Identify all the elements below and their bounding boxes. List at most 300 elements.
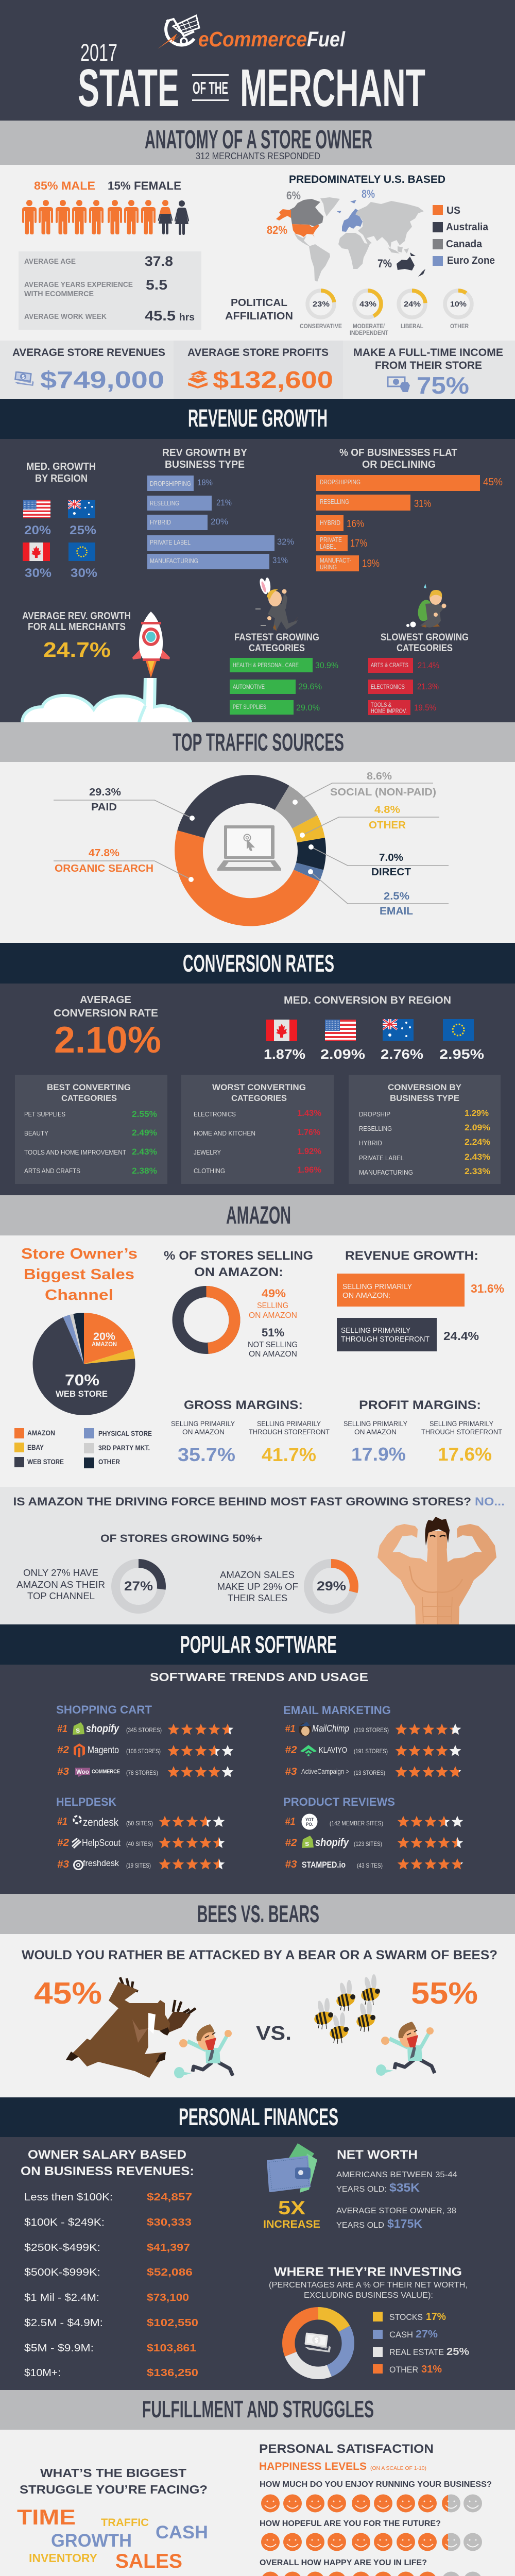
where they're investing: REAL ESTATE	[389, 2347, 444, 2357]
stat: bear 45%: 45%	[34, 1976, 102, 2010]
panel: product reviews: PO.	[306, 1822, 313, 1827]
profit margins	[344, 1398, 502, 1465]
where they're investing: STOCKS	[389, 2312, 423, 2322]
average revenue growth: AVERAGE REV. GROWTH	[22, 611, 131, 622]
panel: conversion by business type: DROPSHIP	[359, 1110, 390, 1118]
donut: top channel: 27%	[124, 1579, 153, 1594]
panel: email marketing: MailChimp	[312, 1723, 349, 1734]
pie chart: AMAZON	[92, 1341, 117, 1348]
happiness row: hopeful: HOW HOPEFUL ARE YOU FOR THE FUTURE?	[260, 2519, 441, 2528]
stores selling on amazon: ON AMAZON	[249, 1350, 297, 1359]
gender split	[22, 179, 189, 235]
panel: product reviews: #2	[285, 1837, 297, 1849]
panel: best converting categories: TOOLS AND HOME IMPROVEMENT	[24, 1148, 126, 1156]
chart: rev growth by business type	[147, 447, 294, 569]
chart: fastest growing categories: HEALTH & PERSONAL CARE	[233, 662, 299, 669]
stores selling on amazon: 51%	[262, 1326, 284, 1339]
chart: rev growth by business type: REV GROWTH BY	[162, 447, 248, 459]
pie chart: WEB STORE	[56, 1389, 108, 1399]
political affiliation: POLITICAL	[231, 297, 287, 309]
world map: 82%	[267, 224, 287, 236]
subheading: SOFTWARE TRENDS AND USAGE	[150, 1670, 368, 1684]
callout: social	[293, 771, 436, 805]
panel: product reviews	[283, 1795, 463, 1870]
heading	[145, 125, 372, 161]
panel: email marketing: ActiveCampaign >	[301, 1767, 349, 1775]
chart: fastest growing categories: FASTEST GROWING	[234, 632, 319, 643]
chart: rev growth by business type: DROPSHIPPING	[150, 480, 191, 487]
panel: average stats: AVERAGE WORK WEEK	[24, 312, 107, 321]
icon: laptop with cursor	[217, 825, 281, 871]
personal satisfaction	[259, 2442, 492, 2576]
chart: slowest growing categories: ARTS & CRAFTS	[371, 662, 408, 669]
chart: fastest growing categories: 29.0%	[296, 703, 320, 713]
subheading: OF STORES GROWING 50%+	[100, 1533, 263, 1545]
vs: VS.	[256, 2023, 291, 2044]
biggest struggle word cloud	[17, 2466, 208, 2572]
biggest struggle word cloud: WHAT’S THE BIGGEST	[40, 2466, 186, 2480]
callout: email: 2.5%	[384, 891, 409, 902]
chart: businesses flat or declining: 31%	[414, 498, 431, 510]
question heading: IS AMAZON THE DRIVING FORCE BEHIND MOST FAST GROWING STORES?	[13, 1495, 471, 1508]
panel: average stats	[19, 251, 201, 330]
panel: email marketing: #1	[285, 1723, 296, 1735]
map legend: Euro Zone	[447, 255, 495, 266]
heading: CONVERSION RATES	[183, 950, 334, 977]
pie legend: WEB STORE	[27, 1458, 64, 1466]
illustration: rocket and cloud	[21, 612, 191, 722]
panel: email marketing: (219 STORES)	[354, 1726, 389, 1734]
personal satisfaction: PERSONAL SATISFACTION	[259, 2442, 434, 2456]
callout: social: 8.6%	[367, 771, 392, 782]
net worth: NET WORTH	[337, 2148, 418, 2162]
chart: businesses flat or declining: DROPSHIPPING	[320, 478, 360, 486]
median conversion by region: 2.09%	[320, 1046, 365, 1062]
illustration: muscle man	[377, 1517, 496, 1624]
owner salary table: $102,550	[147, 2317, 198, 2329]
pie legend	[14, 1428, 152, 1468]
donut: share of sales: THEIR SALES	[228, 1593, 287, 1603]
amazon revenue growth: 24.4%	[443, 1329, 479, 1343]
donut: top channel: TOP CHANNEL	[27, 1591, 95, 1601]
where they're investing: EXCLUDING BUSINESS VALUE):	[304, 2291, 433, 2300]
illustration: bear	[66, 1977, 196, 2078]
political affiliation: MODERATE/	[353, 323, 385, 330]
median growth by region: 30%	[25, 566, 52, 580]
owner salary table: OWNER SALARY BASED	[28, 2148, 186, 2162]
political affiliation: AFFILIATION	[225, 311, 293, 322]
donut: top channel	[16, 1563, 162, 1609]
gross margins: THROUGH STOREFRONT	[249, 1428, 330, 1436]
panel: product reviews: (43 SITES)	[357, 1862, 383, 1869]
panel: helpdesk: (40 SITES)	[126, 1840, 153, 1848]
logo: eCommerceFuel	[158, 15, 346, 51]
panel: conversion by business type: PRIVATE LABEL	[359, 1154, 404, 1162]
chart: rev growth by business type: HYBRID	[150, 518, 171, 526]
map legend: Canada	[446, 239, 483, 250]
panel: conversion by business type: 2.33%	[465, 1166, 490, 1176]
stat: average store revenues: $749,000	[40, 366, 164, 393]
panel: conversion by business type: 2.24%	[465, 1137, 490, 1147]
chart: businesses flat or declining: OR DECLINING	[362, 459, 436, 470]
panel: best converting categories: PET SUPPLIES	[24, 1110, 65, 1118]
average revenue growth: 24.7%	[43, 638, 111, 662]
header	[0, 0, 515, 121]
panel: product reviews: shopify	[315, 1837, 349, 1849]
heading: TOP TRAFFIC SOURCES	[173, 729, 344, 756]
panel: product reviews: (142 MEMBER SITES)	[330, 1820, 383, 1827]
panel: product reviews: PRODUCT REVIEWS	[283, 1795, 395, 1808]
panel: email marketing: (191 STORES)	[354, 1748, 388, 1755]
panel: email marketing: KLAVIYO	[319, 1746, 347, 1755]
panel: email marketing: EMAIL MARKETING	[283, 1704, 391, 1717]
profit margins: 17.9%	[351, 1444, 406, 1465]
pie chart: 70%	[65, 1371, 99, 1389]
icon: wallet	[267, 2143, 317, 2193]
gender split: 15% FEMALE	[108, 179, 181, 192]
chart: businesses flat or declining: URING	[320, 563, 337, 571]
stat: full-time income: 75%	[417, 372, 469, 399]
panel: shopping cart	[56, 1703, 233, 1777]
panel: worst converting categories: WORST CONVERTING	[212, 1082, 306, 1092]
panel: helpdesk: zendesk	[83, 1817, 118, 1828]
panel: conversion by business type: HYBRID	[359, 1139, 382, 1147]
owner salary table: $73,100	[147, 2292, 189, 2303]
stat: bees 55%: 55%	[411, 1976, 478, 2010]
median growth by region: 20%	[24, 523, 51, 537]
chart: rev growth by business type: 31%	[272, 555, 288, 565]
callout: other: 4.8%	[374, 804, 400, 816]
illustration: bunny-eared running man	[255, 578, 298, 631]
net worth: AMERICANS BETWEEN 35-44	[336, 2171, 457, 2179]
panel: average stats: AVERAGE YEARS EXPERIENCE	[24, 280, 133, 289]
world map	[267, 188, 425, 282]
owner salary table: $30,333	[147, 2217, 192, 2228]
biggest struggle word cloud: TRAFFIC	[101, 2517, 149, 2529]
chart: rev growth by business type: 18%	[197, 478, 213, 487]
illustration: man running from bees	[376, 2022, 435, 2076]
heading: biggest sales channel: Channel	[45, 1287, 113, 1303]
biggest struggle word cloud: TIME	[17, 2505, 76, 2529]
heading: POPULAR SOFTWARE	[180, 1631, 337, 1658]
panel: average stats: hrs	[179, 312, 195, 323]
heading: predominately U.S. based: PREDOMINATELY U.S. BASED	[289, 174, 445, 185]
panel: shopping cart: #1	[57, 1723, 67, 1735]
donut: share of sales	[217, 1563, 354, 1609]
panel: best converting categories: CATEGORIES	[61, 1093, 117, 1103]
callout: organic search: ORGANIC SEARCH	[55, 863, 153, 874]
median growth by region: 25%	[70, 523, 96, 537]
amazon revenue growth	[337, 1249, 504, 1351]
average revenue growth: FOR ALL MERCHANTS	[28, 621, 126, 633]
profit margins: ON AMAZON	[354, 1428, 397, 1436]
panel: worst converting categories: CLOTHING	[194, 1167, 225, 1175]
political affiliation: LIBERAL	[401, 323, 423, 330]
panel: best converting categories: 2.49%	[132, 1128, 157, 1138]
logo: eCommerceFuel: Fuel	[307, 27, 346, 51]
panel: best converting categories: BEST CONVERTING	[47, 1082, 131, 1092]
happiness row: life	[260, 2558, 482, 2576]
amazon revenue growth: REVENUE GROWTH:	[345, 1249, 478, 1263]
stat: average store profits	[174, 341, 343, 399]
median conversion by region: MED. CONVERSION BY REGION	[284, 995, 451, 1006]
callout: other: OTHER	[369, 820, 406, 831]
section: fulfillment and struggles	[0, 2390, 515, 2576]
median conversion by region: 1.87%	[264, 1046, 305, 1062]
panel: worst converting categories: 1.96%	[297, 1165, 321, 1175]
panel: shopping cart: (78 STORES)	[126, 1769, 158, 1776]
owner salary table: $250K-$499K:	[24, 2242, 100, 2253]
political affiliation: INDEPENDENT	[350, 329, 389, 336]
section: bees vs bears	[0, 1894, 515, 2097]
pie legend: 3RD PARTY MKT.	[98, 1444, 150, 1452]
owner salary table: $52,086	[147, 2267, 193, 2278]
callout: paid: PAID	[91, 802, 117, 813]
callout: organic search: 47.8%	[89, 848, 119, 859]
biggest struggle word cloud: SALES	[115, 2550, 182, 2572]
chart: slowest growing categories: 21.4%	[418, 660, 439, 670]
callout: direct	[308, 844, 449, 878]
panel: helpdesk: (19 SITES)	[126, 1862, 151, 1869]
section: personal finances	[0, 2097, 515, 2390]
where they're investing: 31%	[421, 2364, 442, 2375]
stat: full-time income: FROM THEIR STORE	[375, 360, 482, 371]
panel: helpdesk: HELPDESK	[56, 1795, 116, 1808]
panel: email marketing: #2	[285, 1744, 297, 1756]
world map: 6%	[286, 189, 301, 202]
stat: average store profits: AVERAGE STORE PROFITS	[187, 347, 329, 359]
amazon revenue growth: 31.6%	[471, 1282, 504, 1295]
panel: best converting categories: BEAUTY	[24, 1129, 48, 1137]
average conversion rate	[54, 994, 161, 1061]
median growth by region	[23, 461, 97, 580]
heading: PERSONAL FINANCES	[179, 2103, 338, 2130]
chart: fastest growing categories: 29.6%	[298, 682, 322, 691]
chart: rev growth by business type: PRIVATE LABEL	[150, 538, 191, 546]
callout: organic search	[54, 848, 194, 882]
panel: worst converting categories: JEWELRY	[194, 1148, 221, 1156]
callout: direct: 7.0%	[379, 852, 403, 863]
owner salary table: $500K-$999K:	[24, 2267, 100, 2278]
median growth by region: MED. GROWTH	[26, 461, 96, 472]
panel: shopping cart: Woo	[76, 1768, 89, 1775]
panel: is amazon the driving force	[0, 1487, 515, 1624]
panel: product reviews: STAMPED.io	[302, 1860, 346, 1870]
stores selling on amazon: ON AMAZON	[249, 1311, 297, 1320]
owner salary table: $10M+:	[24, 2367, 61, 2379]
panel: shopping cart: s	[76, 1726, 80, 1735]
chart: businesses flat or declining: HYBRID	[320, 519, 340, 527]
chart: slowest growing categories: ELECTRONICS	[371, 683, 405, 690]
net worth: YEARS OLD:	[336, 2185, 387, 2194]
stores selling on amazon: NOT SELLING	[248, 1341, 298, 1349]
world map: 7%	[377, 257, 392, 270]
illustration: man running from bear	[174, 2024, 233, 2078]
gross margins: 41.7%	[262, 1444, 316, 1465]
panel: shopping cart: (345 STORES)	[126, 1726, 162, 1734]
chart: fastest growing categories: AUTOMOTIVE	[233, 683, 265, 690]
panel: worst converting categories: 1.92%	[297, 1146, 321, 1156]
panel: conversion by business type: RESELLING	[359, 1125, 392, 1132]
panel: conversion by business type: CONVERSION BY	[388, 1082, 462, 1092]
chart: slowest growing categories: SLOWEST GROWING	[381, 632, 469, 643]
title: 2017	[80, 39, 117, 66]
happiness row: hopeful	[260, 2519, 482, 2551]
callout: email: EMAIL	[380, 906, 413, 917]
title	[78, 39, 425, 117]
profit margins: 17.6%	[438, 1444, 492, 1465]
map legend: US	[447, 205, 460, 216]
political affiliation	[225, 291, 472, 336]
where they're investing: WHERE THEY’RE INVESTING	[274, 2265, 462, 2279]
chart: rev growth by business type: RESELLING	[150, 499, 179, 507]
political affiliation: 23%	[313, 300, 330, 309]
chart: businesses flat or declining: 17%	[350, 538, 367, 549]
where they're investing: 17%	[426, 2311, 446, 2323]
stores selling on amazon: ON AMAZON:	[194, 1265, 283, 1279]
callout: direct: DIRECT	[371, 867, 411, 878]
panel: best converting categories: 2.55%	[132, 1109, 157, 1119]
panel: worst converting categories: 1.76%	[297, 1127, 320, 1137]
chart: rev growth by business type: 32%	[277, 537, 294, 547]
average conversion rate: CONVERSION RATE	[54, 1008, 158, 1019]
panel: average stats: AVERAGE AGE	[24, 257, 76, 266]
profit margins: SELLING PRIMARILY	[430, 1419, 494, 1428]
panel: worst converting categories	[181, 1075, 334, 1184]
chart: fastest growing categories	[230, 632, 338, 715]
amazon revenue growth: SELLING PRIMARILY	[342, 1282, 412, 1291]
section: revenue growth	[0, 399, 515, 722]
chart: businesses flat or declining: MANUFACT-	[320, 556, 351, 564]
chart: slowest growing categories: CATEGORIES	[397, 643, 453, 654]
owner salary table: $41,397	[147, 2242, 190, 2253]
panel: average stats: 45.5	[145, 308, 176, 324]
panel: helpdesk: #1	[57, 1816, 67, 1827]
illustration: turtle-shell walking man	[406, 584, 446, 628]
panel: worst converting categories: ELECTRONICS	[194, 1110, 236, 1118]
median growth by region: BY REGION	[35, 473, 88, 484]
amazon revenue growth: SELLING PRIMARILY	[341, 1326, 410, 1335]
owner salary table: $136,250	[147, 2367, 198, 2379]
panel: best converting categories: ARTS AND CRAFTS	[24, 1167, 80, 1175]
political affiliation: CONSERVATIVE	[300, 323, 342, 330]
panel: email marketing: #3	[285, 1766, 297, 1777]
stat: 5x increase	[263, 2197, 320, 2230]
chart: rev growth by business type: 20%	[211, 517, 228, 527]
panel: product reviews: YOT	[305, 1817, 314, 1822]
gross margins: 35.7%	[178, 1444, 235, 1465]
panel: conversion by business type: 2.43%	[465, 1152, 490, 1162]
panel: product reviews: s	[305, 1839, 309, 1848]
median conversion by region: 2.95%	[439, 1046, 484, 1062]
owner salary table: $24,857	[147, 2192, 192, 2203]
panel: worst converting categories: HOME AND KITCHEN	[194, 1129, 255, 1137]
panel: helpdesk: (50 SITES)	[126, 1820, 153, 1827]
panel: shopping cart: COMMERCE	[92, 1769, 120, 1775]
gross margins	[171, 1398, 330, 1465]
logo: eCommerceFuel: eCommerce	[198, 27, 307, 51]
heading: BEES VS. BEARS	[197, 1900, 319, 1927]
question: WOULD YOU RATHER BE ATTACKED BY A BEAR OR A SWARM OF BEES?	[22, 1948, 497, 1962]
donut: share of sales: AMAZON SALES	[220, 1570, 295, 1580]
donut: top channel: ONLY 27% HAVE	[23, 1568, 98, 1578]
stat: average store revenues: AVERAGE STORE REVENUES	[12, 347, 165, 359]
chart: slowest growing categories: HOME IMPROV.	[371, 707, 407, 715]
biggest struggle word cloud: GROWTH	[51, 2531, 132, 2551]
panel: email marketing	[283, 1704, 461, 1777]
chart: businesses flat or declining: LABEL	[320, 543, 336, 550]
net worth	[336, 2148, 457, 2230]
heading: 312 MERCHANTS RESPONDED	[196, 151, 320, 161]
panel: average stats: WITH ECOMMERCE	[24, 290, 94, 298]
owner salary table: $103,861	[147, 2343, 196, 2354]
panel: conversion by business type: 1.29%	[465, 1108, 489, 1118]
panel: shopping cart: shopify	[86, 1723, 119, 1735]
heading: REVENUE GROWTH	[188, 405, 328, 432]
heading: FULFILLMENT AND STRUGGLES	[142, 2396, 374, 2422]
where they're investing: CASH	[389, 2330, 413, 2340]
panel: shopping cart: SHOPPING CART	[56, 1703, 152, 1716]
panel: product reviews: #1	[285, 1816, 296, 1827]
pie legend: PHYSICAL STORE	[98, 1429, 152, 1437]
owner salary table	[21, 2148, 198, 2379]
panel: product reviews: (123 SITES)	[354, 1840, 382, 1848]
gross margins: GROSS MARGINS:	[184, 1398, 303, 1412]
gross margins: SELLING PRIMARILY	[257, 1419, 321, 1428]
owner salary table: $1 Mil - $2.4M:	[24, 2292, 99, 2303]
callout: email	[308, 869, 449, 917]
pie legend: EBAY	[27, 1443, 44, 1451]
where they're investing: OTHER	[389, 2365, 418, 2375]
chart: slowest growing categories: TOOLS &	[371, 701, 391, 708]
gross margins: ON AMAZON	[182, 1428, 225, 1436]
pie legend: AMAZON	[27, 1429, 55, 1437]
stat: full-time income: MAKE A FULL-TIME INCOME	[353, 347, 503, 359]
panel: shopping cart: Magento	[88, 1745, 119, 1756]
panel: shopping cart: #3	[57, 1766, 69, 1777]
section: anatomy of a store owner	[0, 121, 515, 399]
chart: rev growth by business type: BUSINESS TYPE	[165, 459, 245, 470]
panel: conversion by business type: MANUFACTURING	[359, 1168, 413, 1176]
callout: paid: 29.3%	[89, 787, 121, 798]
political affiliation: OTHER	[450, 323, 469, 330]
stat: 5x increase: 5X	[278, 2197, 305, 2218]
pie chart	[33, 1313, 135, 1415]
panel: conversion by business type: 2.09%	[465, 1123, 490, 1132]
chart: fastest growing categories: PET SUPPLIES	[233, 703, 266, 710]
chart: businesses flat or declining: 16%	[347, 518, 364, 530]
profit margins: THROUGH STOREFRONT	[421, 1428, 502, 1436]
profit margins: SELLING PRIMARILY	[344, 1419, 408, 1428]
section: top traffic sources	[0, 722, 515, 943]
panel: average stats: 5.5	[146, 277, 167, 293]
political affiliation: 43%	[359, 300, 376, 309]
median conversion by region: 2.76%	[381, 1046, 423, 1062]
panel: worst converting categories: 1.43%	[297, 1108, 321, 1118]
personal satisfaction: (ON A SCALE OF 1-10)	[370, 2465, 426, 2471]
panel: shopping cart: #2	[57, 1744, 69, 1756]
question heading: NO...	[475, 1495, 505, 1508]
panel: helpdesk	[56, 1795, 225, 1870]
chart: fastest growing categories: CATEGORIES	[249, 643, 305, 654]
chart: slowest growing categories: 21.3%	[417, 682, 439, 691]
illustration: swarm of bees	[313, 1974, 382, 2044]
panel: helpdesk: freshdesk	[83, 1858, 119, 1868]
world map: 8%	[362, 188, 375, 200]
chart: rev growth by business type: 21%	[216, 498, 232, 507]
panel: helpdesk: HelpScout	[82, 1838, 121, 1848]
panel: helpdesk: #2	[57, 1837, 69, 1849]
